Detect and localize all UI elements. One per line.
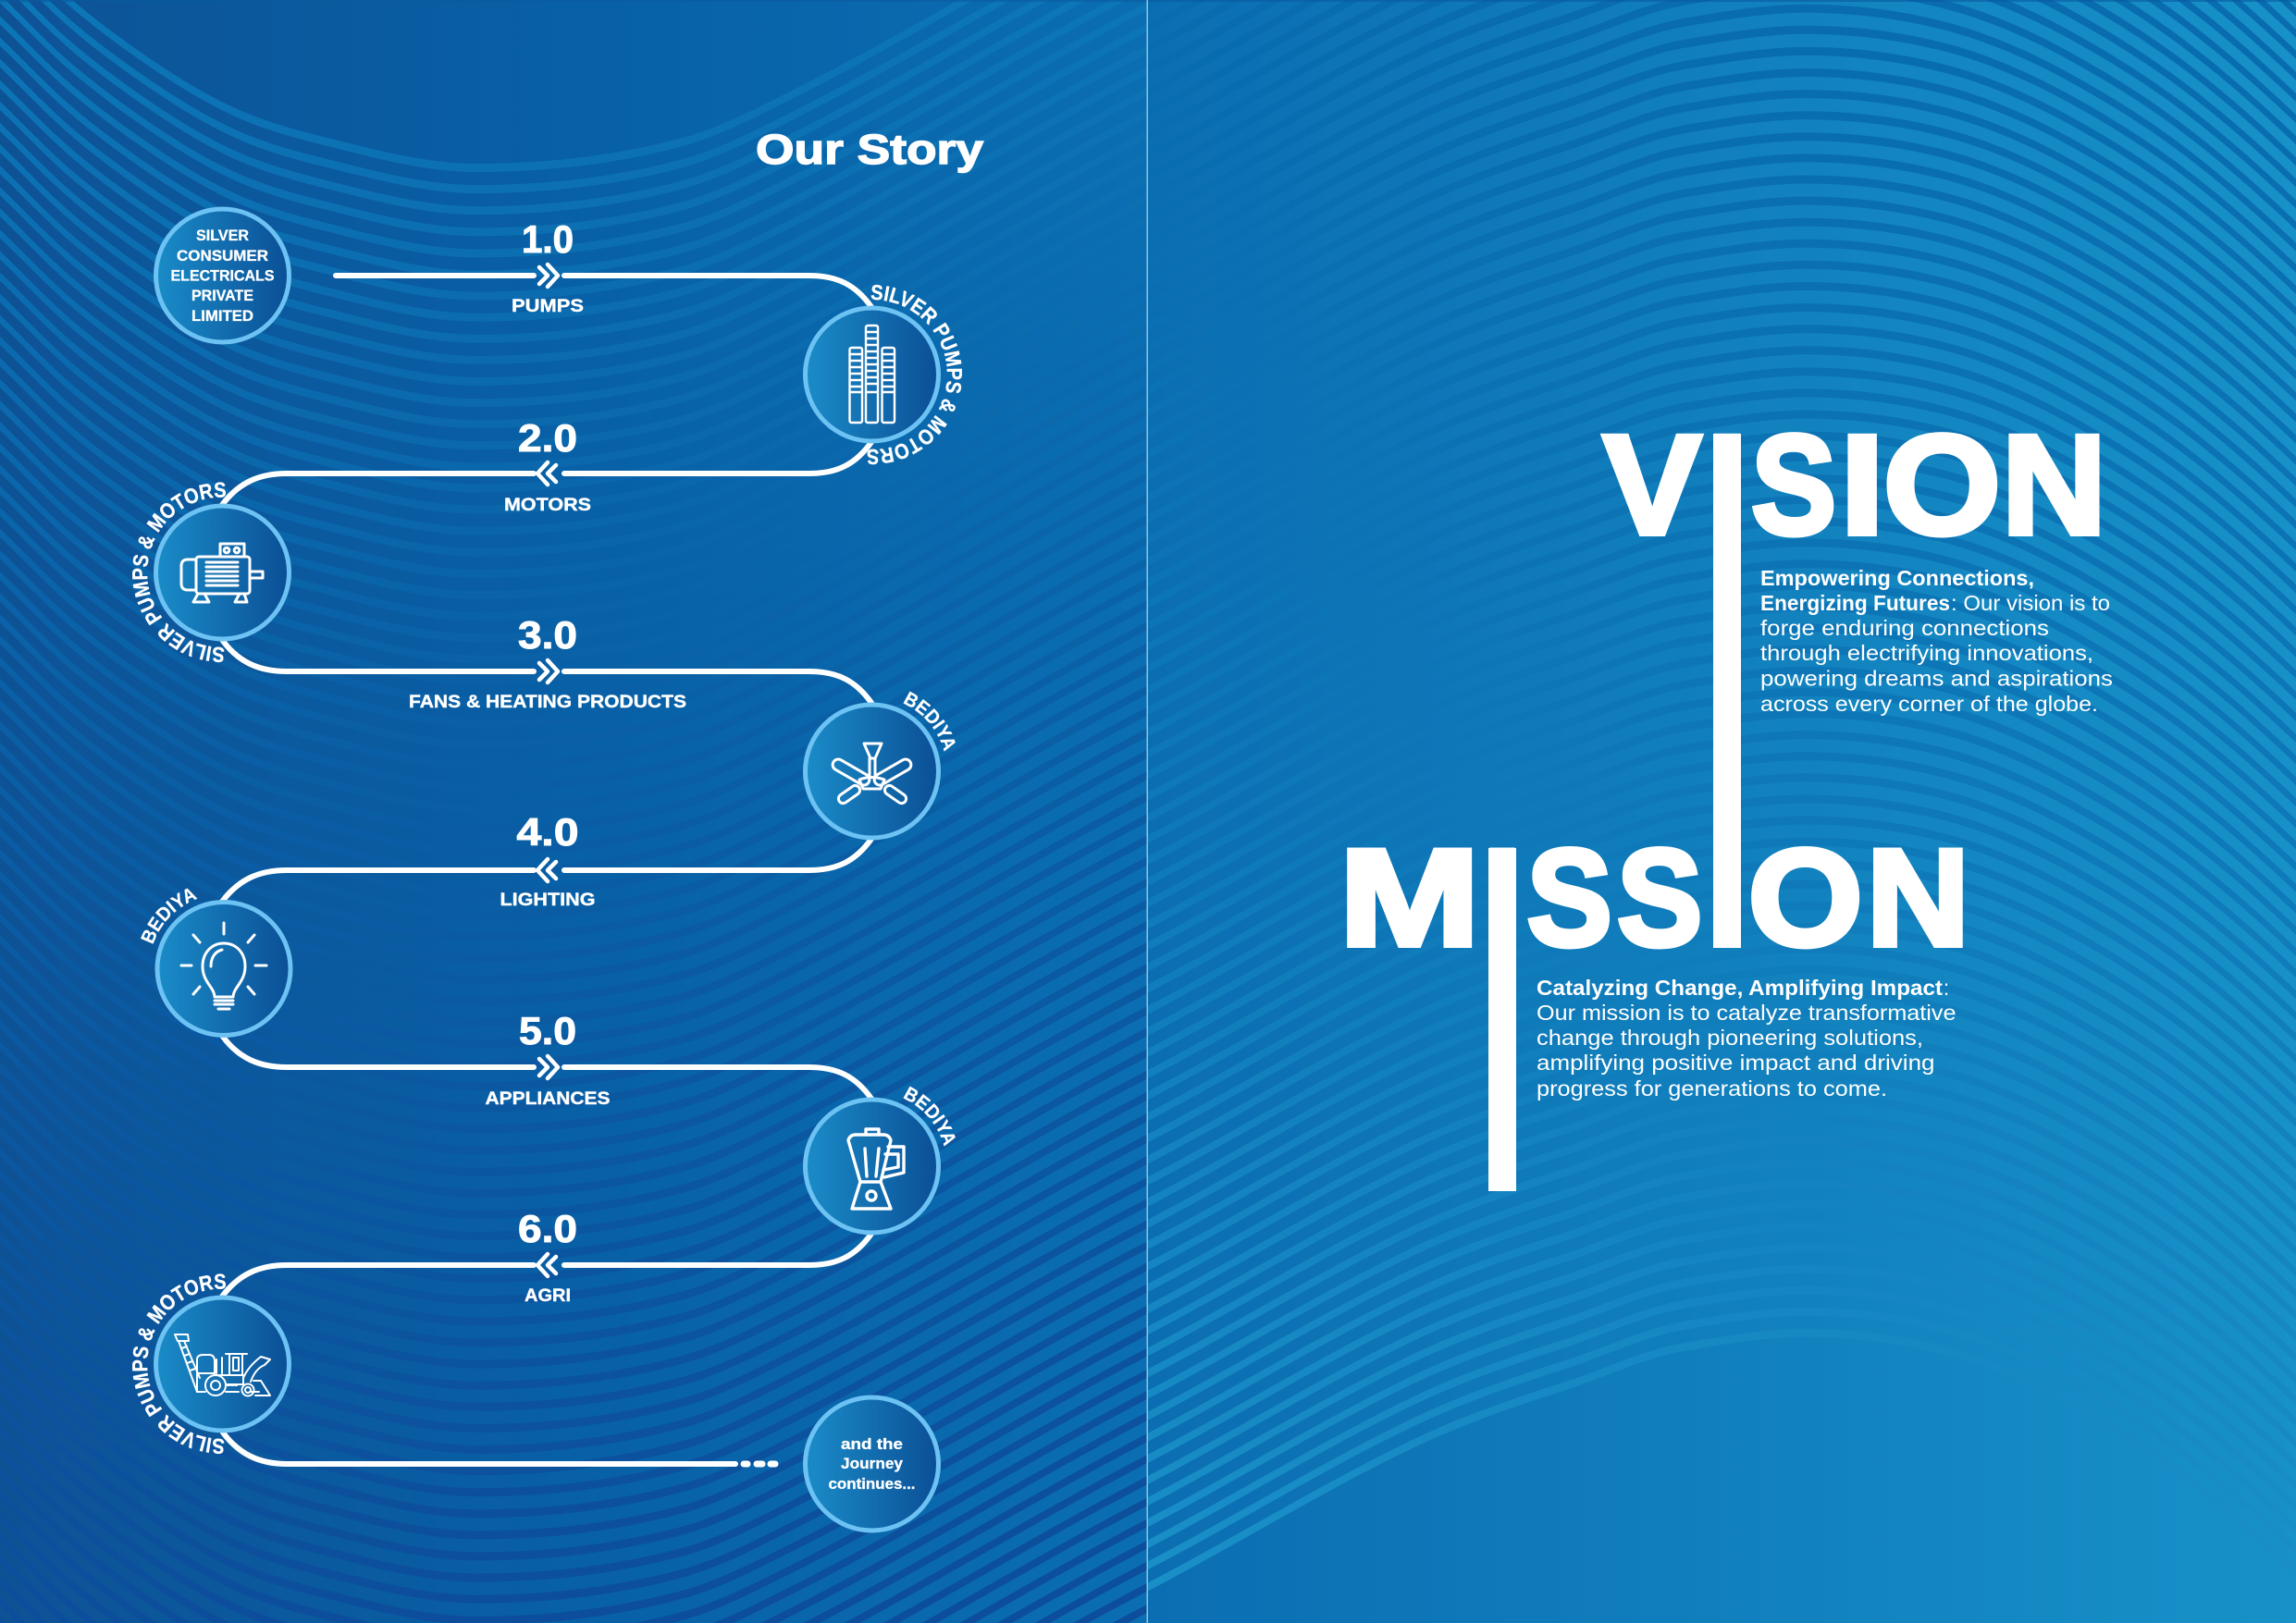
step 1.0 pumps: 1.0 bbox=[522, 217, 574, 261]
title: Our Story: Our Story bbox=[756, 126, 983, 173]
text block: mission statement bbox=[1537, 976, 1956, 1100]
step 6.0 agri: 6.0 bbox=[518, 1207, 577, 1250]
wave pattern: left page bbox=[0, 0, 1147, 1623]
step 4.0 lighting bbox=[500, 810, 596, 910]
arrow: step 2 bbox=[537, 462, 556, 485]
badge: company name: CONSUMER bbox=[177, 248, 268, 264]
heading: MISSION: I bbox=[1708, 820, 1747, 975]
arrow: step 6 bbox=[537, 1254, 556, 1276]
text block: vision statement: through electrifying innovations, bbox=[1760, 641, 2093, 665]
step 1.0 pumps bbox=[512, 217, 584, 316]
text block: mission statement: Catalyzing Change, Amplifying Impact bbox=[1537, 976, 1943, 1000]
badge: blender icon with curved brand bbox=[803, 1086, 956, 1236]
heading: MISSION: S bbox=[1617, 820, 1702, 975]
arrow: step 5 bbox=[539, 1056, 558, 1078]
arrow: step 1 bbox=[539, 264, 558, 287]
badge: journey continues: continues... bbox=[829, 1476, 916, 1493]
heading: VISION: S bbox=[1751, 406, 1836, 564]
badge: bulb icon with curved brand bbox=[141, 888, 292, 1038]
heading: MISSION: O bbox=[1748, 820, 1863, 975]
heading: VISION: V bbox=[1603, 406, 1701, 564]
badge: motor icon with curved brand: SILVER PUMPS & MOTORS bbox=[132, 482, 226, 662]
badge: journey continues bbox=[805, 1397, 938, 1531]
text block: vision statement: Energizing Futures bbox=[1760, 591, 1950, 615]
badge: company name: PRIVATE bbox=[191, 288, 253, 304]
text block: vision statement: forge enduring connections bbox=[1760, 616, 2049, 640]
badge: journey continues: Journey bbox=[841, 1456, 904, 1472]
text block: vision statement: powering dreams and aspirations bbox=[1760, 666, 2113, 690]
icon: electric motor bbox=[181, 544, 263, 602]
step 2.0 motors: 2.0 bbox=[518, 416, 577, 460]
panel: our story timeline bbox=[132, 126, 984, 1533]
badge: agri machine icon with curved brand bbox=[132, 1273, 291, 1454]
heading: VISION: I bbox=[1708, 406, 1747, 564]
badge: company name bbox=[155, 209, 289, 342]
step 2.0 motors bbox=[504, 416, 591, 515]
step 4.0 lighting: LIGHTING bbox=[500, 890, 596, 910]
heading: VISION: O bbox=[1883, 406, 2001, 564]
step 4.0 lighting: 4.0 bbox=[516, 810, 579, 854]
badge: company name: SILVER bbox=[196, 227, 249, 244]
badge: pumps icon with curved brand: SILVER PUMPS & MOTORS bbox=[868, 285, 962, 464]
text block: vision statement bbox=[1760, 566, 2113, 716]
heading: VISION: N bbox=[2002, 406, 2106, 564]
badge: journey continues: and the bbox=[841, 1436, 903, 1453]
badge: fan icon with curved brand bbox=[803, 692, 956, 840]
heading: VISION: I bbox=[1840, 406, 1884, 564]
step 5.0 appliances: 5.0 bbox=[519, 1009, 576, 1052]
badge: agri machine icon with curved brand: SILVER PUMPS & MOTORS bbox=[132, 1273, 226, 1454]
step 6.0 agri: AGRI bbox=[525, 1285, 571, 1306]
step 3.0 fans and heating: FANS & HEATING PRODUCTS bbox=[409, 692, 686, 712]
text block: mission statement: Our mission is to catalyze transformative bbox=[1537, 1001, 1956, 1025]
text block: mission statement: amplifying positive impact and driving bbox=[1537, 1051, 1935, 1075]
step 3.0 fans and heating bbox=[409, 613, 686, 712]
badge: bulb icon with curved brand: BEDIYA bbox=[141, 888, 198, 944]
step 6.0 agri bbox=[518, 1207, 577, 1306]
badge: motor icon with curved brand bbox=[132, 482, 291, 662]
heading: VISION bbox=[1603, 406, 2106, 948]
text block: vision statement: : Our vision is to bbox=[1951, 591, 2110, 615]
icon: light bulb bbox=[181, 923, 266, 1009]
arrow: step 4 bbox=[537, 859, 556, 881]
icon: blender bbox=[848, 1129, 904, 1209]
step 2.0 motors: MOTORS bbox=[504, 495, 591, 515]
panel: vision and mission bbox=[1339, 406, 2113, 1191]
heading: MISSION: M bbox=[1339, 820, 1480, 975]
badge: fan icon with curved brand: BEDIYA bbox=[903, 692, 956, 751]
heading: MISSION: S bbox=[1527, 820, 1612, 975]
icon: submersible pumps bbox=[849, 326, 895, 423]
arrow: step 3 bbox=[539, 660, 558, 682]
step 5.0 appliances bbox=[485, 1009, 611, 1109]
step 1.0 pumps: PUMPS bbox=[512, 296, 584, 316]
heading: MISSION bbox=[1339, 820, 1969, 1191]
badge: blender icon with curved brand: BEDIYA bbox=[903, 1086, 956, 1147]
heading: MISSION: I bbox=[1483, 820, 1522, 975]
text block: vision statement: Empowering Connections, bbox=[1760, 566, 2034, 590]
badge: company name: ELECTRICALS bbox=[170, 268, 274, 285]
text block: mission statement: progress for generations to come. bbox=[1537, 1076, 1887, 1100]
step 3.0 fans and heating: 3.0 bbox=[518, 613, 577, 657]
text block: vision statement: across every corner of the globe. bbox=[1760, 692, 2098, 716]
text block: mission statement: : bbox=[1944, 976, 1949, 1000]
heading: MISSION: N bbox=[1867, 820, 1969, 975]
timeline connector path bbox=[222, 276, 871, 1464]
text block: mission statement: change through pioneering solutions, bbox=[1537, 1026, 1923, 1050]
icon: ceiling fan bbox=[831, 744, 913, 805]
badge: company name: LIMITED bbox=[191, 308, 253, 325]
icon: harvester bbox=[175, 1334, 270, 1396]
badge: pumps icon with curved brand bbox=[803, 285, 962, 464]
wave pattern: right page bbox=[1147, 0, 2296, 1623]
step 5.0 appliances: APPLIANCES bbox=[485, 1088, 611, 1109]
